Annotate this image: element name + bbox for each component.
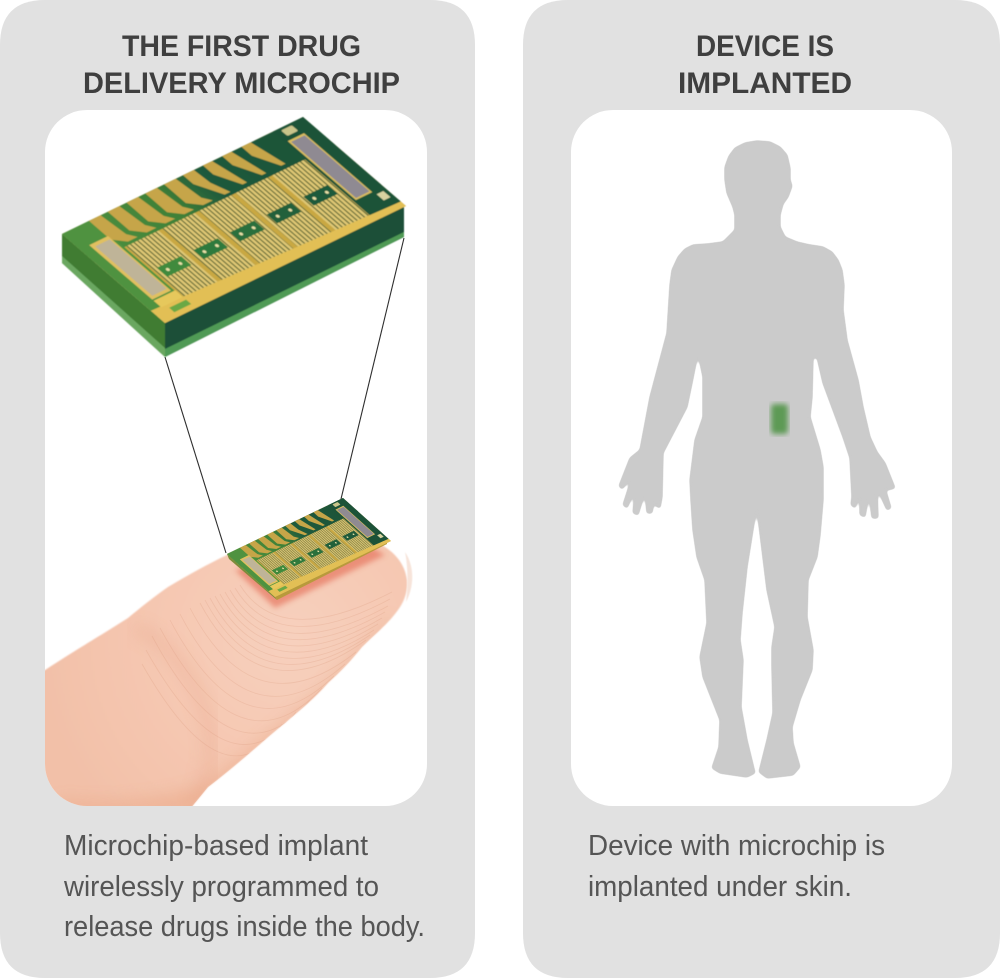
description: release drugs inside the body.	[64, 911, 425, 943]
description: Microchip-based implant	[64, 830, 368, 862]
nail edge	[405, 552, 412, 602]
crease	[148, 634, 214, 792]
panel background	[523, 0, 1000, 978]
heading: IMPLANTED	[678, 67, 852, 100]
description	[63, 830, 425, 943]
chip shadow	[235, 540, 385, 608]
ridges	[142, 585, 392, 756]
heading: THE FIRST DRUG	[122, 30, 361, 63]
connector lines	[165, 238, 404, 553]
implanted device glow	[771, 404, 788, 434]
heading: DEVICE IS	[696, 30, 834, 63]
panel: first drug delivery microchip	[0, 0, 475, 978]
finger shading	[50, 585, 392, 815]
description	[588, 830, 885, 903]
description: Device with microchip is	[588, 830, 885, 862]
chip left side	[62, 234, 165, 357]
human silhouette	[619, 141, 895, 778]
heading: DELIVERY MICROCHIP	[83, 67, 400, 100]
heading	[678, 30, 852, 100]
description: wirelessly programmed to	[63, 871, 379, 903]
image card	[571, 110, 952, 806]
panel background	[0, 0, 475, 978]
chip top surface	[62, 117, 406, 323]
enlarged microchip	[62, 117, 406, 357]
chip right side	[165, 205, 404, 357]
finger photo	[45, 546, 412, 806]
small microchip on fingertip	[227, 498, 391, 600]
heading	[83, 30, 400, 100]
panel: device is implanted	[523, 0, 1000, 978]
description: implanted under skin.	[588, 871, 852, 903]
lower shading	[67, 622, 387, 806]
image card	[45, 110, 427, 806]
